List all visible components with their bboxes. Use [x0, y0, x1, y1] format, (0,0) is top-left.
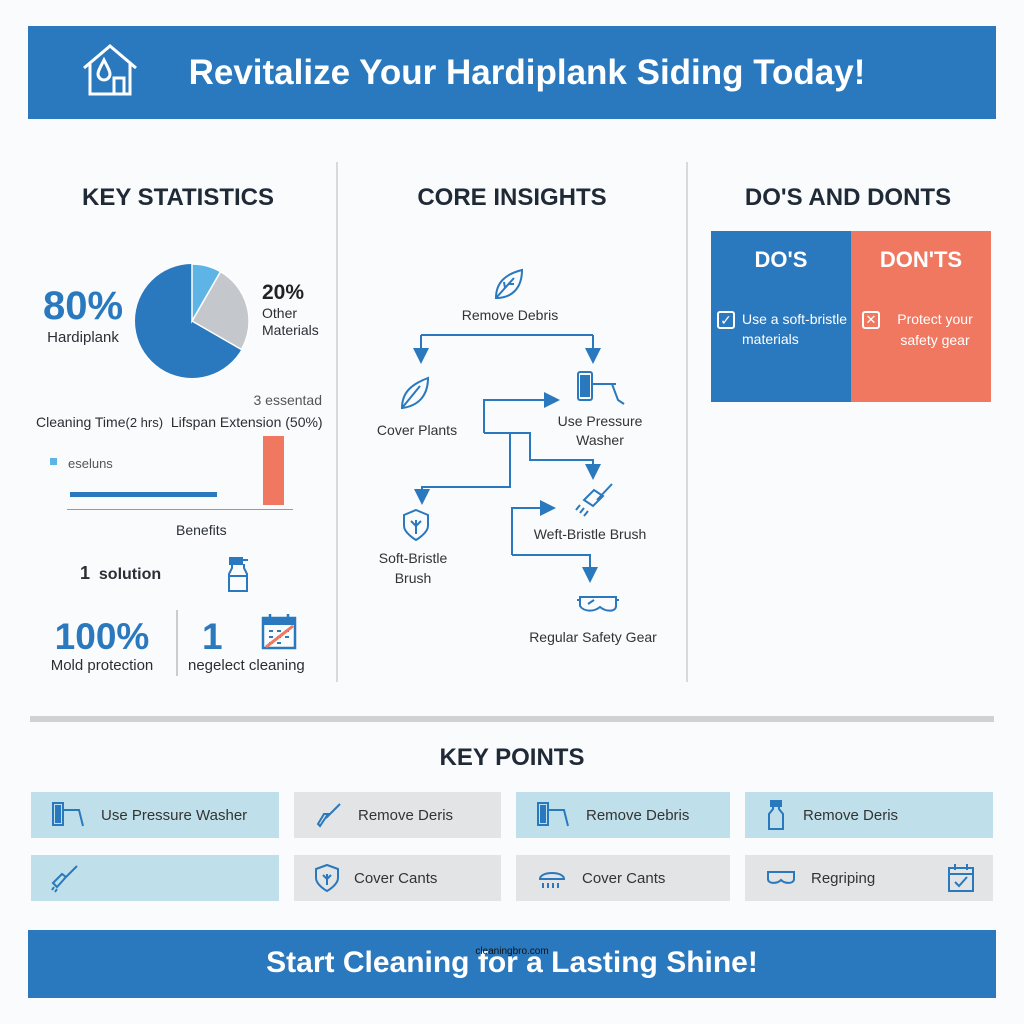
stat: 1 neglect cleaning: 1 — [202, 616, 223, 657]
panel: do's: DO'S — [755, 247, 807, 272]
bar chart — [36, 392, 323, 538]
panel: do's: ✓ — [720, 312, 732, 328]
heading: dos and donts: DO'S AND DONTS — [745, 184, 951, 211]
panel: don'ts: Protect your — [897, 311, 973, 327]
heading: core insights: CORE INSIGHTS — [417, 184, 607, 211]
stat: 20% other: Materials — [262, 322, 319, 338]
key points grid — [31, 792, 993, 901]
stat: 1 solution: 1 solution — [80, 563, 161, 583]
panel: do's: materials — [742, 331, 799, 347]
key points grid: Remove Debris — [586, 806, 689, 824]
flowchart: Brush — [395, 570, 431, 586]
key points grid: Cover Cants — [354, 870, 437, 886]
flowchart: Washer — [576, 432, 624, 448]
header banner — [28, 26, 996, 119]
stat: 20% other: 20% — [262, 281, 304, 304]
bar chart: 3 essentad — [254, 392, 322, 408]
stat: 80% hardiplank: 80% — [43, 284, 123, 328]
key points grid: Regriping — [811, 870, 875, 886]
icon: calendar crossed — [262, 614, 296, 650]
key points grid: Remove Deris — [358, 806, 453, 824]
key points grid: Use Pressure Washer — [101, 806, 247, 824]
bar chart: eseluns — [68, 456, 113, 471]
heading: key statistics: KEY STATISTICS — [82, 184, 274, 211]
stat: 1 neglect cleaning — [188, 616, 305, 674]
stat: 100% mold: 100% — [55, 616, 149, 657]
flowchart — [377, 268, 657, 645]
flowchart: Use Pressure — [558, 413, 643, 429]
panel: don'ts — [851, 231, 991, 402]
bar chart: Cleaning Time(2 hrs) Lifspan Extension (50%) — [36, 414, 323, 430]
flowchart: Remove Debris — [462, 307, 558, 323]
footer banner: cleaningbro.com — [475, 946, 549, 957]
stat: 20% other — [262, 281, 319, 338]
stat: 20% other: Other — [262, 305, 297, 321]
flowchart: Cover Plants — [377, 422, 457, 438]
panel: do's: Use a soft-bristle — [742, 311, 847, 327]
icon: spray bottle — [228, 557, 248, 592]
panel: don'ts: safety gear — [900, 332, 970, 348]
panel: don'ts: ✕ — [866, 312, 876, 327]
stat: 100% mold: Mold protection — [51, 657, 153, 674]
panel: do's — [711, 231, 851, 402]
pie chart — [135, 264, 248, 378]
key points grid: Remove Deris — [803, 806, 898, 824]
stat: 1 neglect cleaning: negelect cleaning — [188, 657, 305, 674]
stat: 100% mold — [51, 616, 153, 674]
heading: key points: KEY POINTS — [440, 744, 584, 771]
footer banner — [28, 930, 996, 998]
icon: house with drop — [83, 44, 137, 96]
stat: 80% hardiplank: Hardiplank — [47, 329, 119, 346]
bar chart: Benefits — [176, 522, 227, 538]
icon: leaf — [496, 270, 522, 298]
flowchart: Regular Safety Gear — [529, 629, 657, 645]
key points grid: Cover Cants — [582, 870, 665, 886]
title: Revitalize Your Hardiplank Siding Today! — [189, 53, 865, 92]
flowchart: Weft-Bristle Brush — [534, 526, 646, 542]
flowchart: Soft-Bristle — [379, 550, 447, 566]
panel: don'ts: DON'TS — [880, 247, 962, 272]
footer banner: Start Cleaning for a Lasting Shine! — [266, 946, 758, 979]
